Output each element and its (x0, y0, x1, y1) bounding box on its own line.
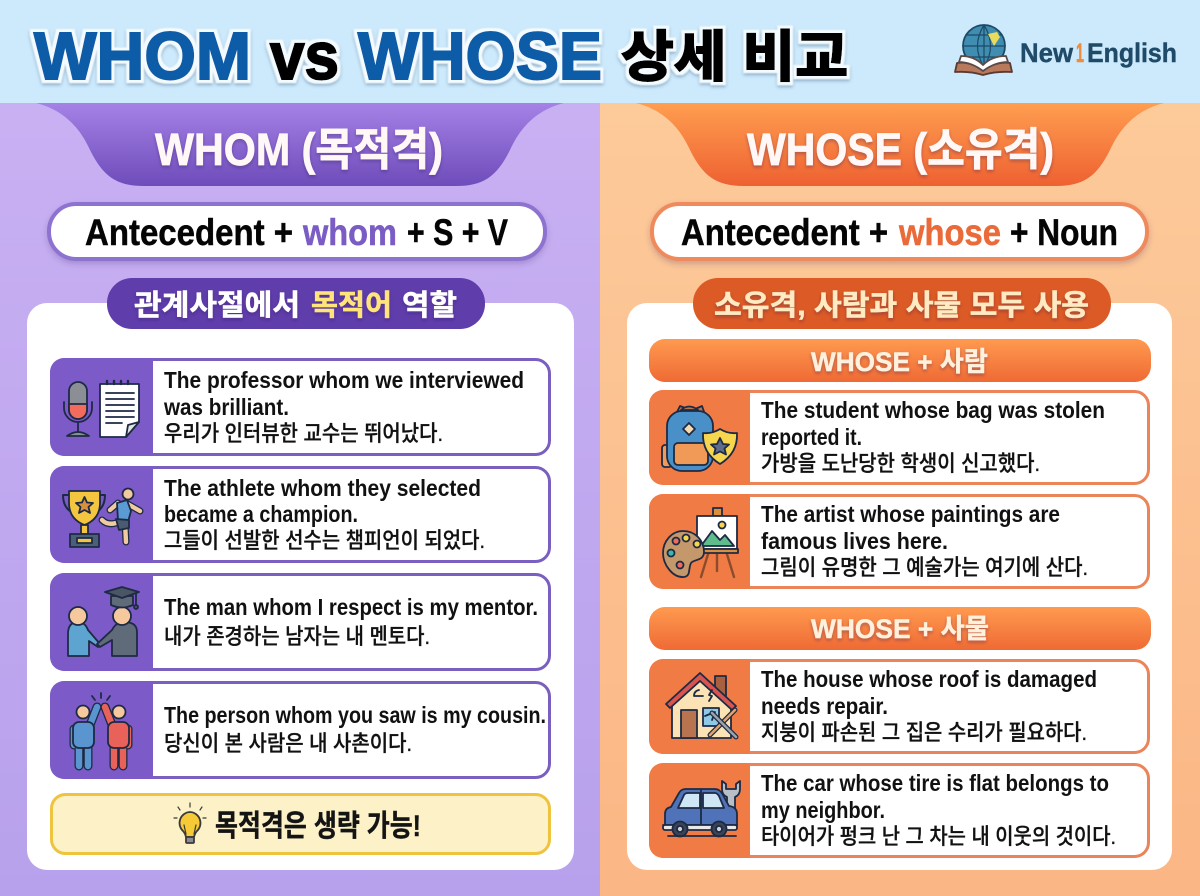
title: WHOSE (358, 19, 602, 94)
panel: WHOSE (600, 103, 1200, 896)
example row: house (649, 659, 1148, 754)
subheading pill: 소유격, 사람과 사물 모두 사용 (714, 289, 1089, 322)
example row: car: 타이어가 펑크 난 그 차는 내 이웃의 것이다. (761, 824, 1116, 849)
logo wordmark: English (1087, 38, 1177, 68)
subheading pill: 목적어 (311, 289, 392, 322)
formula: whom: whom (302, 212, 397, 253)
group heading: WHOSE + thing: WHOSE + 사물 (811, 614, 989, 644)
icon: trophy and runner (63, 488, 140, 547)
example row: athlete (50, 466, 550, 563)
callout: omission tip: 목적격은 생략 가능! (215, 810, 421, 843)
example row: athlete: The athlete whom they selected (164, 475, 481, 501)
example row: car: my neighbor. (761, 797, 885, 823)
example row: athlete: became a champion. (164, 501, 358, 527)
group heading: WHOSE + person (649, 339, 1151, 382)
example row: professor: was brilliant. (163, 394, 289, 420)
example row: athlete: 그들이 선발한 선수는 챔피언이 되었다. (164, 528, 485, 553)
group heading: WHOSE + person: WHOSE + 사람 (811, 347, 988, 377)
panel: WHOM (0, 103, 600, 896)
example row: student: The student whose bag was stolen (761, 397, 1105, 423)
subheading pill (693, 278, 1111, 329)
title: 상세 비교 (621, 26, 848, 88)
example row: house: 지붕이 파손된 그 집은 수리가 필요하다. (761, 720, 1087, 745)
example row: professor: The professor whom we interviewed (164, 367, 524, 393)
example row: artist: 그림이 유명한 그 예술가는 여기에 산다. (761, 555, 1088, 580)
example row: student: reported it. (761, 424, 862, 450)
logo wordmark: 1 (1076, 38, 1084, 68)
example row: car: The car whose tire is flat belongs to (761, 770, 1109, 796)
group heading: WHOSE + thing (649, 607, 1151, 650)
example row: car (649, 763, 1148, 858)
logo (955, 25, 1177, 75)
icon: globe and book (955, 25, 1012, 75)
example row: student: 가방을 도난당한 학생이 신고했다. (761, 451, 1040, 476)
icon: house with tools (666, 673, 736, 738)
callout: omission tip (52, 794, 550, 854)
example row: cousin (50, 681, 550, 779)
formula: whose (652, 204, 1147, 259)
example row: house: needs repair. (761, 693, 888, 719)
formula: whom (49, 204, 545, 259)
ribbon heading: WHOSE: WHOSE (소유격) (747, 124, 1054, 175)
logo wordmark: New (1020, 38, 1074, 68)
example row: cousin: The person whom you saw is my cousin. (164, 702, 546, 728)
title: WHOM (34, 19, 251, 94)
example row: cousin: 당신이 본 사람은 내 사촌이다. (164, 731, 412, 756)
subheading pill (107, 278, 485, 329)
example row: artist: famous lives here. (761, 528, 948, 554)
formula: whose: Antecedent + (681, 212, 888, 253)
icon: microphone and notepad (64, 381, 139, 437)
example row: professor (50, 358, 550, 456)
icon: handshake with graduate (68, 587, 139, 656)
example row: mentor: 내가 존경하는 남자는 내 멘토다. (164, 624, 430, 649)
subheading pill: 관계사절에서 (134, 289, 300, 322)
formula: whose: + Noun (1010, 212, 1118, 253)
icon: light bulb (174, 803, 206, 843)
example row: house: The house whose roof is damaged (761, 666, 1097, 692)
icon: palette and easel (663, 508, 738, 577)
formula: whom: + S + V (407, 212, 508, 253)
icon: high five (73, 693, 129, 766)
ribbon heading: WHOM (36, 103, 564, 186)
icon: backpack and badge (662, 406, 737, 471)
example row: student (649, 390, 1148, 485)
formula: whom: Antecedent + (85, 212, 293, 253)
subheading pill: 역할 (402, 289, 457, 322)
logo wordmark (1020, 38, 1177, 68)
title (34, 19, 848, 94)
formula: whose: whose (898, 212, 1001, 253)
white card (27, 303, 574, 870)
example row: artist: The artist whose paintings are (761, 501, 1060, 527)
example row: artist (649, 494, 1148, 589)
icon: car with wrench (663, 781, 740, 836)
header band (0, 0, 1200, 103)
ribbon heading: WHOM: WHOM (목적격) (155, 124, 443, 175)
example row: professor: 우리가 인터뷰한 교수는 뛰어났다. (164, 421, 443, 446)
example row: mentor: The man whom I respect is my mentor. (164, 594, 538, 620)
title: vs (270, 19, 339, 94)
ribbon heading: WHOSE (636, 103, 1164, 186)
example row: mentor (50, 573, 550, 671)
white card (627, 303, 1172, 870)
